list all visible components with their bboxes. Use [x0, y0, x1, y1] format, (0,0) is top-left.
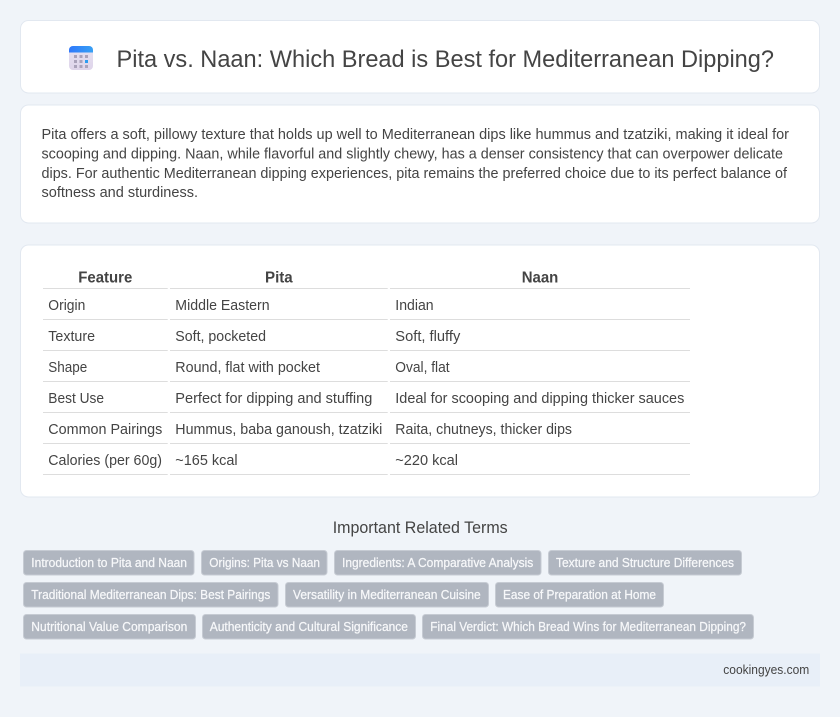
tag: Authenticity and Cultural Significance	[210, 619, 408, 634]
row: common pairings: Common Pairings	[48, 422, 162, 438]
row: shape: Round, flat with pocket	[175, 360, 320, 376]
heading: related terms: Important Related Terms	[333, 519, 508, 537]
row: origin: Middle Eastern	[175, 298, 270, 314]
footer: cookingyes.com	[723, 662, 809, 677]
row: common pairings: Raita, chutneys, thicker dips	[395, 422, 572, 438]
header panel	[20, 20, 820, 93]
row: best use: Ideal for scooping and dipping thicker sauces	[395, 391, 684, 407]
row: best use: Perfect for dipping and stuffing	[175, 391, 372, 407]
table header row: Pita	[265, 270, 293, 286]
tag	[422, 614, 754, 639]
row: best use: Best Use	[48, 391, 104, 407]
tag: Nutritional Value Comparison	[31, 619, 187, 634]
tag: Traditional Mediterranean Dips: Best Pairings	[31, 587, 271, 602]
row: calories: ~220 kcal	[395, 453, 458, 469]
row: texture: Soft, fluffy	[395, 329, 461, 345]
tag	[24, 550, 194, 575]
tag: Introduction to Pita and Naan	[31, 555, 187, 570]
row: best use	[48, 391, 684, 407]
row: common pairings	[48, 422, 572, 438]
row: common pairings: Hummus, baba ganoush, tzatziki	[175, 422, 382, 438]
footer	[20, 654, 820, 686]
row: shape: Oval, flat	[395, 360, 450, 376]
icon: calendar	[69, 46, 93, 70]
panel: summary paragraph: Pita offers a soft, pillowy texture that holds up well to Mediterranean dips like hummus and tzatziki, making it ideal for	[42, 126, 789, 143]
tag: Ingredients: A Comparative Analysis	[342, 555, 534, 570]
row: texture: Soft, pocketed	[175, 329, 266, 345]
panel: comparison table	[20, 245, 820, 497]
tag: Origins: Pita vs Naan	[209, 555, 320, 570]
tag	[24, 582, 278, 607]
title: Pita vs. Naan: Which Bread is Best for Mediterranean Dipping?	[116, 46, 774, 73]
tag: Texture and Structure Differences	[556, 555, 734, 570]
row: shape	[48, 360, 450, 376]
table header row	[78, 270, 558, 286]
related terms tags	[24, 550, 754, 639]
row: origin: Indian	[395, 298, 434, 314]
tag	[202, 614, 416, 639]
row: origin: Origin	[48, 298, 85, 314]
tag: Versatility in Mediterranean Cuisine	[293, 587, 481, 602]
tag	[496, 582, 664, 607]
tag	[202, 550, 327, 575]
row: texture: Texture	[48, 329, 95, 345]
panel: summary paragraph: softness and sturdiness.	[42, 184, 198, 201]
table header row: Naan	[522, 270, 558, 286]
row: shape: Shape	[48, 360, 87, 376]
row: calories	[48, 453, 458, 469]
row: calories: ~165 kcal	[175, 453, 238, 469]
tag	[548, 550, 742, 575]
tag: Ease of Preparation at Home	[503, 587, 656, 602]
row: origin	[48, 298, 434, 314]
tag	[334, 550, 541, 575]
row: texture	[48, 329, 461, 345]
row: calories: Calories (per 60g)	[48, 453, 162, 469]
panel: summary paragraph: dips. For authentic Mediterranean dipping experiences, pita remains the preferred choice due to its perfect balance of	[42, 165, 788, 182]
panel: summary paragraph: scooping and dipping. Naan, while flavorful and slightly chewy, has a denser consistency that can overpower delicate	[42, 146, 783, 162]
tag: Final Verdict: Which Bread Wins for Mediterranean Dipping?	[430, 619, 746, 634]
tag	[24, 614, 196, 639]
tag	[286, 582, 488, 607]
panel: summary paragraph	[20, 105, 820, 223]
table header row: Feature	[78, 270, 132, 286]
